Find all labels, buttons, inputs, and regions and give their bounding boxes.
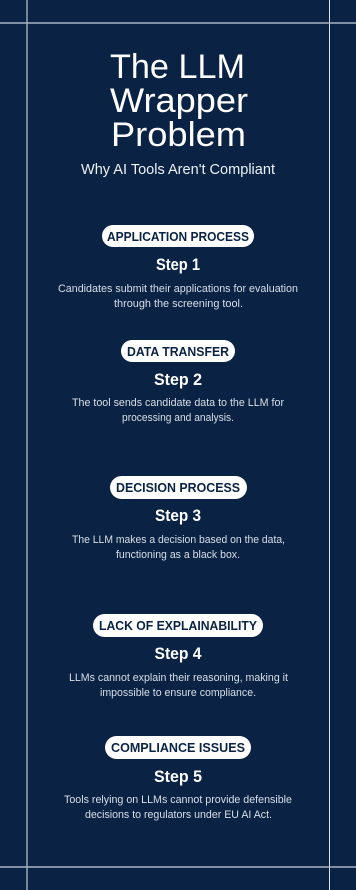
title: The LLM bbox=[110, 48, 245, 86]
heading: step 2: Step 2 bbox=[154, 370, 202, 389]
panel: step 4 bbox=[69, 614, 288, 699]
title bbox=[110, 48, 248, 154]
description: step 4: impossible to ensure compliance. bbox=[100, 687, 256, 699]
description: step 5 bbox=[64, 794, 292, 821]
heading: step 5: Step 5 bbox=[154, 767, 202, 786]
label pill: data transfer: DATA TRANSFER bbox=[127, 344, 230, 359]
title: Wrapper bbox=[110, 82, 248, 120]
label pill: compliance issues: COMPLIANCE ISSUES bbox=[111, 740, 245, 755]
description: step 2: processing and analysis. bbox=[122, 412, 234, 424]
label pill: decision process bbox=[110, 476, 247, 499]
description: step 3: The LLM makes a decision based on the data, bbox=[72, 534, 285, 546]
subtitle: Why AI Tools Aren't Compliant bbox=[81, 161, 276, 178]
label pill: application process bbox=[102, 225, 254, 247]
label pill: lack of explainability bbox=[93, 614, 263, 637]
label pill: lack of explainability: LACK OF EXPLAINABILITY bbox=[99, 618, 257, 633]
description: step 4: LLMs cannot explain their reasoning, making it bbox=[69, 672, 288, 684]
heading: step 3: Step 3 bbox=[155, 506, 201, 525]
label pill: decision process: DECISION PROCESS bbox=[116, 480, 240, 495]
panel: step 5 bbox=[64, 736, 292, 821]
label pill: application process: APPLICATION PROCESS bbox=[107, 229, 249, 244]
heading: step 4: Step 4 bbox=[154, 644, 202, 663]
description: step 5: decisions to regulators under EU AI Act. bbox=[85, 809, 272, 821]
description: step 4 bbox=[69, 672, 288, 699]
description: step 5: Tools relying on LLMs cannot provide defensible bbox=[64, 794, 292, 806]
description: step 1: through the screening tool. bbox=[114, 298, 243, 310]
heading: step 1: Step 1 bbox=[156, 255, 200, 274]
description: step 3 bbox=[72, 534, 285, 561]
description: step 2 bbox=[72, 397, 284, 424]
panel: step 1 bbox=[58, 225, 298, 310]
description: step 2: The tool sends candidate data to the LLM for bbox=[72, 397, 284, 409]
label pill: data transfer bbox=[121, 340, 235, 362]
title: Problem bbox=[111, 116, 246, 154]
panel: step 3 bbox=[72, 476, 285, 561]
description: step 1 bbox=[58, 283, 298, 310]
description: step 3: functioning as a black box. bbox=[116, 549, 240, 561]
description: step 1: Candidates submit their applications for evaluation bbox=[58, 283, 298, 295]
panel: step 2 bbox=[72, 340, 284, 424]
label pill: compliance issues bbox=[105, 736, 251, 759]
